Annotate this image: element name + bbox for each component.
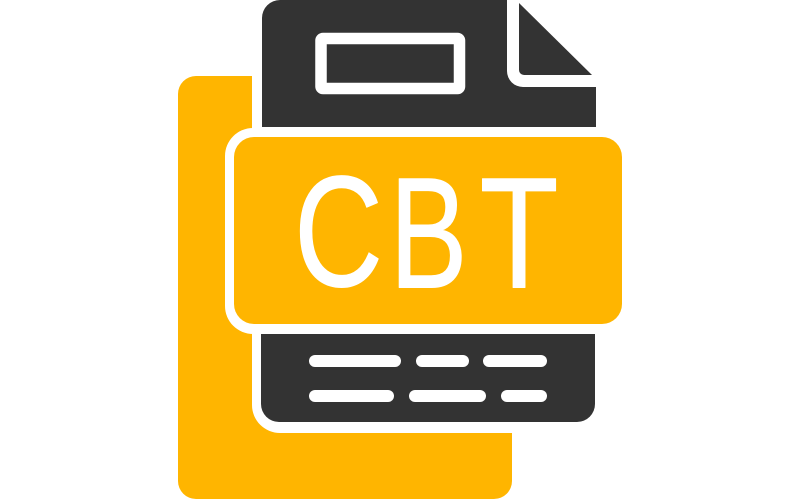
banner (234, 137, 622, 324)
text lines (309, 355, 547, 402)
banner outline (225, 128, 631, 334)
front page lower section (261, 334, 595, 422)
front page upper section (262, 0, 596, 127)
banner label (294, 144, 559, 322)
folded corner (519, 3, 592, 75)
banner label: C (294, 144, 383, 321)
banner label: T (480, 144, 559, 321)
title placeholder box (321, 38, 460, 88)
back page (178, 76, 512, 499)
banner label: B (390, 145, 467, 322)
